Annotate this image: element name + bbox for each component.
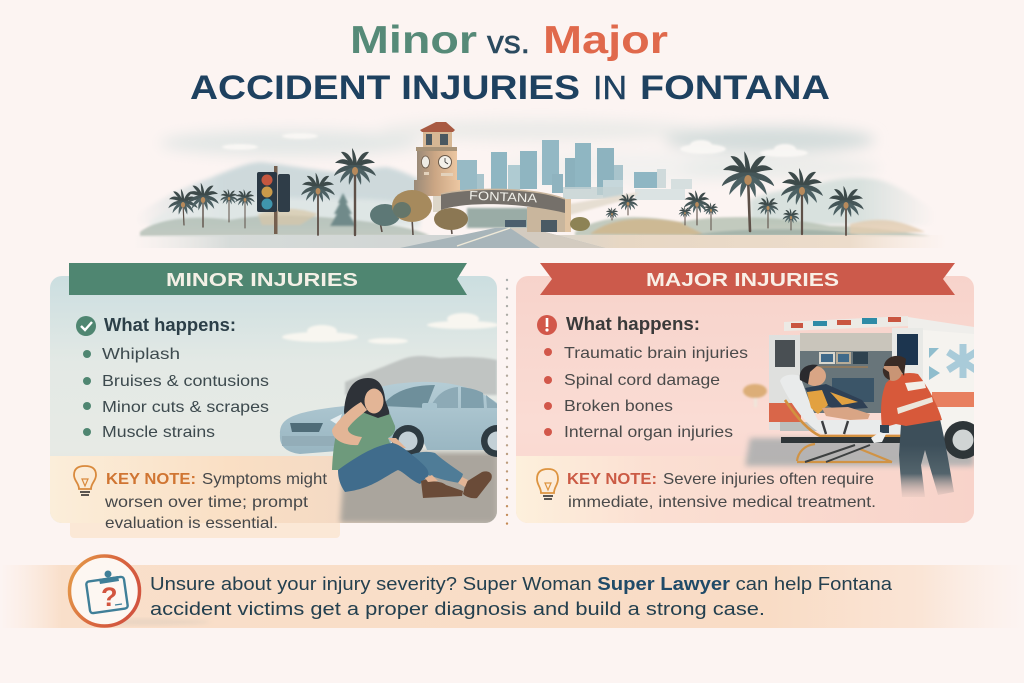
panel background and scene — [516, 276, 982, 523]
banner: major injuries: MAJOR INJURIES — [646, 269, 839, 290]
key note text: immediate, intensive medical treatment. — [568, 494, 876, 511]
heading line: Accident injuries in Fontana: FONTANA — [640, 69, 830, 107]
ground and road — [132, 228, 947, 248]
footer text: accident victims get a proper diagnosis and build a strong case. — [150, 599, 765, 619]
foliage and ground cover — [140, 192, 930, 236]
trees near the gate — [370, 190, 590, 235]
Fontana gate — [441, 189, 571, 232]
dotted divider: vertical — [506, 280, 508, 525]
sky washes — [160, 120, 880, 184]
mountains — [135, 162, 935, 230]
road — [340, 452, 497, 523]
panel background and scene — [50, 276, 513, 523]
icon: light bulb — [537, 469, 558, 499]
callout: footer message — [0, 556, 1024, 628]
palm trees — [168, 148, 864, 235]
icon: clipboard question: ? — [101, 582, 118, 612]
banner: major injuries — [540, 263, 955, 295]
key note text: KEY NOTE: — [567, 471, 657, 488]
heading line: Accident injuries in Fontana — [190, 69, 830, 107]
key note text — [567, 471, 876, 511]
icon: exclamation mark — [537, 315, 557, 335]
panel: minor injuries — [50, 263, 513, 538]
heading line: Minor vs. Major: Minor — [350, 19, 477, 62]
icon: clipboard question — [70, 556, 210, 626]
panel: major injuries — [516, 263, 982, 523]
title — [190, 19, 830, 107]
key note text — [104, 471, 328, 532]
list: minor injuries: Whiplash — [102, 346, 180, 363]
paramedic — [871, 356, 954, 497]
list: major injuries: Broken bones — [564, 398, 673, 415]
banner: minor injuries — [69, 263, 467, 295]
list: minor injuries: Muscle strains — [102, 424, 215, 441]
list: major injuries: Spinal cord damage — [564, 372, 720, 389]
illustration: Fontana skyline — [132, 120, 947, 248]
pavement — [745, 438, 974, 466]
key note text: worsen over time; prompt — [104, 494, 309, 511]
Fontana gate: FONTANA — [469, 189, 538, 206]
list: minor injuries: Minor cuts & scrapes — [102, 399, 269, 416]
list: major injuries — [544, 345, 748, 441]
key note text: KEY NOTE: — [106, 471, 196, 488]
subheading: what happens: What happens: — [566, 314, 700, 334]
subheading: what happens: What happens: — [104, 315, 236, 335]
woman — [332, 378, 492, 498]
icon: check mark — [76, 316, 96, 336]
footer text: Unsure about your injury severity? Super Woman Super Lawyer can help Fontana — [150, 574, 893, 594]
key note backing strip — [70, 510, 340, 538]
list: major injuries: Traumatic brain injuries — [564, 345, 748, 362]
heading line: Accident injuries in Fontana: IN — [593, 69, 627, 106]
distant tree — [743, 384, 767, 407]
heading line: Accident injuries in Fontana: ACCIDENT INJURIES — [190, 69, 580, 107]
key note text: evaluation is essential. — [105, 515, 278, 532]
ambulance — [769, 316, 982, 459]
icon: light bulb — [74, 466, 96, 495]
heading line: Minor vs. Major — [350, 19, 668, 62]
dotted divider: horizontal — [362, 534, 975, 536]
traffic light — [257, 166, 290, 234]
car — [280, 382, 513, 457]
key note text: Symptoms might — [202, 471, 328, 488]
footer band — [0, 565, 1024, 628]
city buildings — [457, 140, 692, 200]
clouds — [222, 133, 808, 157]
list: minor injuries — [83, 346, 269, 441]
banner: minor injuries: MINOR INJURIES — [166, 269, 358, 290]
key note band — [50, 456, 497, 523]
footer text — [150, 574, 893, 619]
list: minor injuries: Bruises & contusions — [102, 373, 269, 390]
mountain — [345, 356, 497, 395]
clouds — [282, 313, 499, 344]
key note band — [516, 456, 974, 523]
heading line: Minor vs. Major: Major — [543, 19, 668, 62]
stretcher and patient — [780, 365, 908, 462]
list: major injuries: Internal organ injuries — [564, 424, 733, 441]
heading line: Minor vs. Major: vs. — [487, 24, 530, 60]
clock tower — [414, 122, 460, 212]
key note text: Severe injuries often require — [663, 471, 874, 488]
